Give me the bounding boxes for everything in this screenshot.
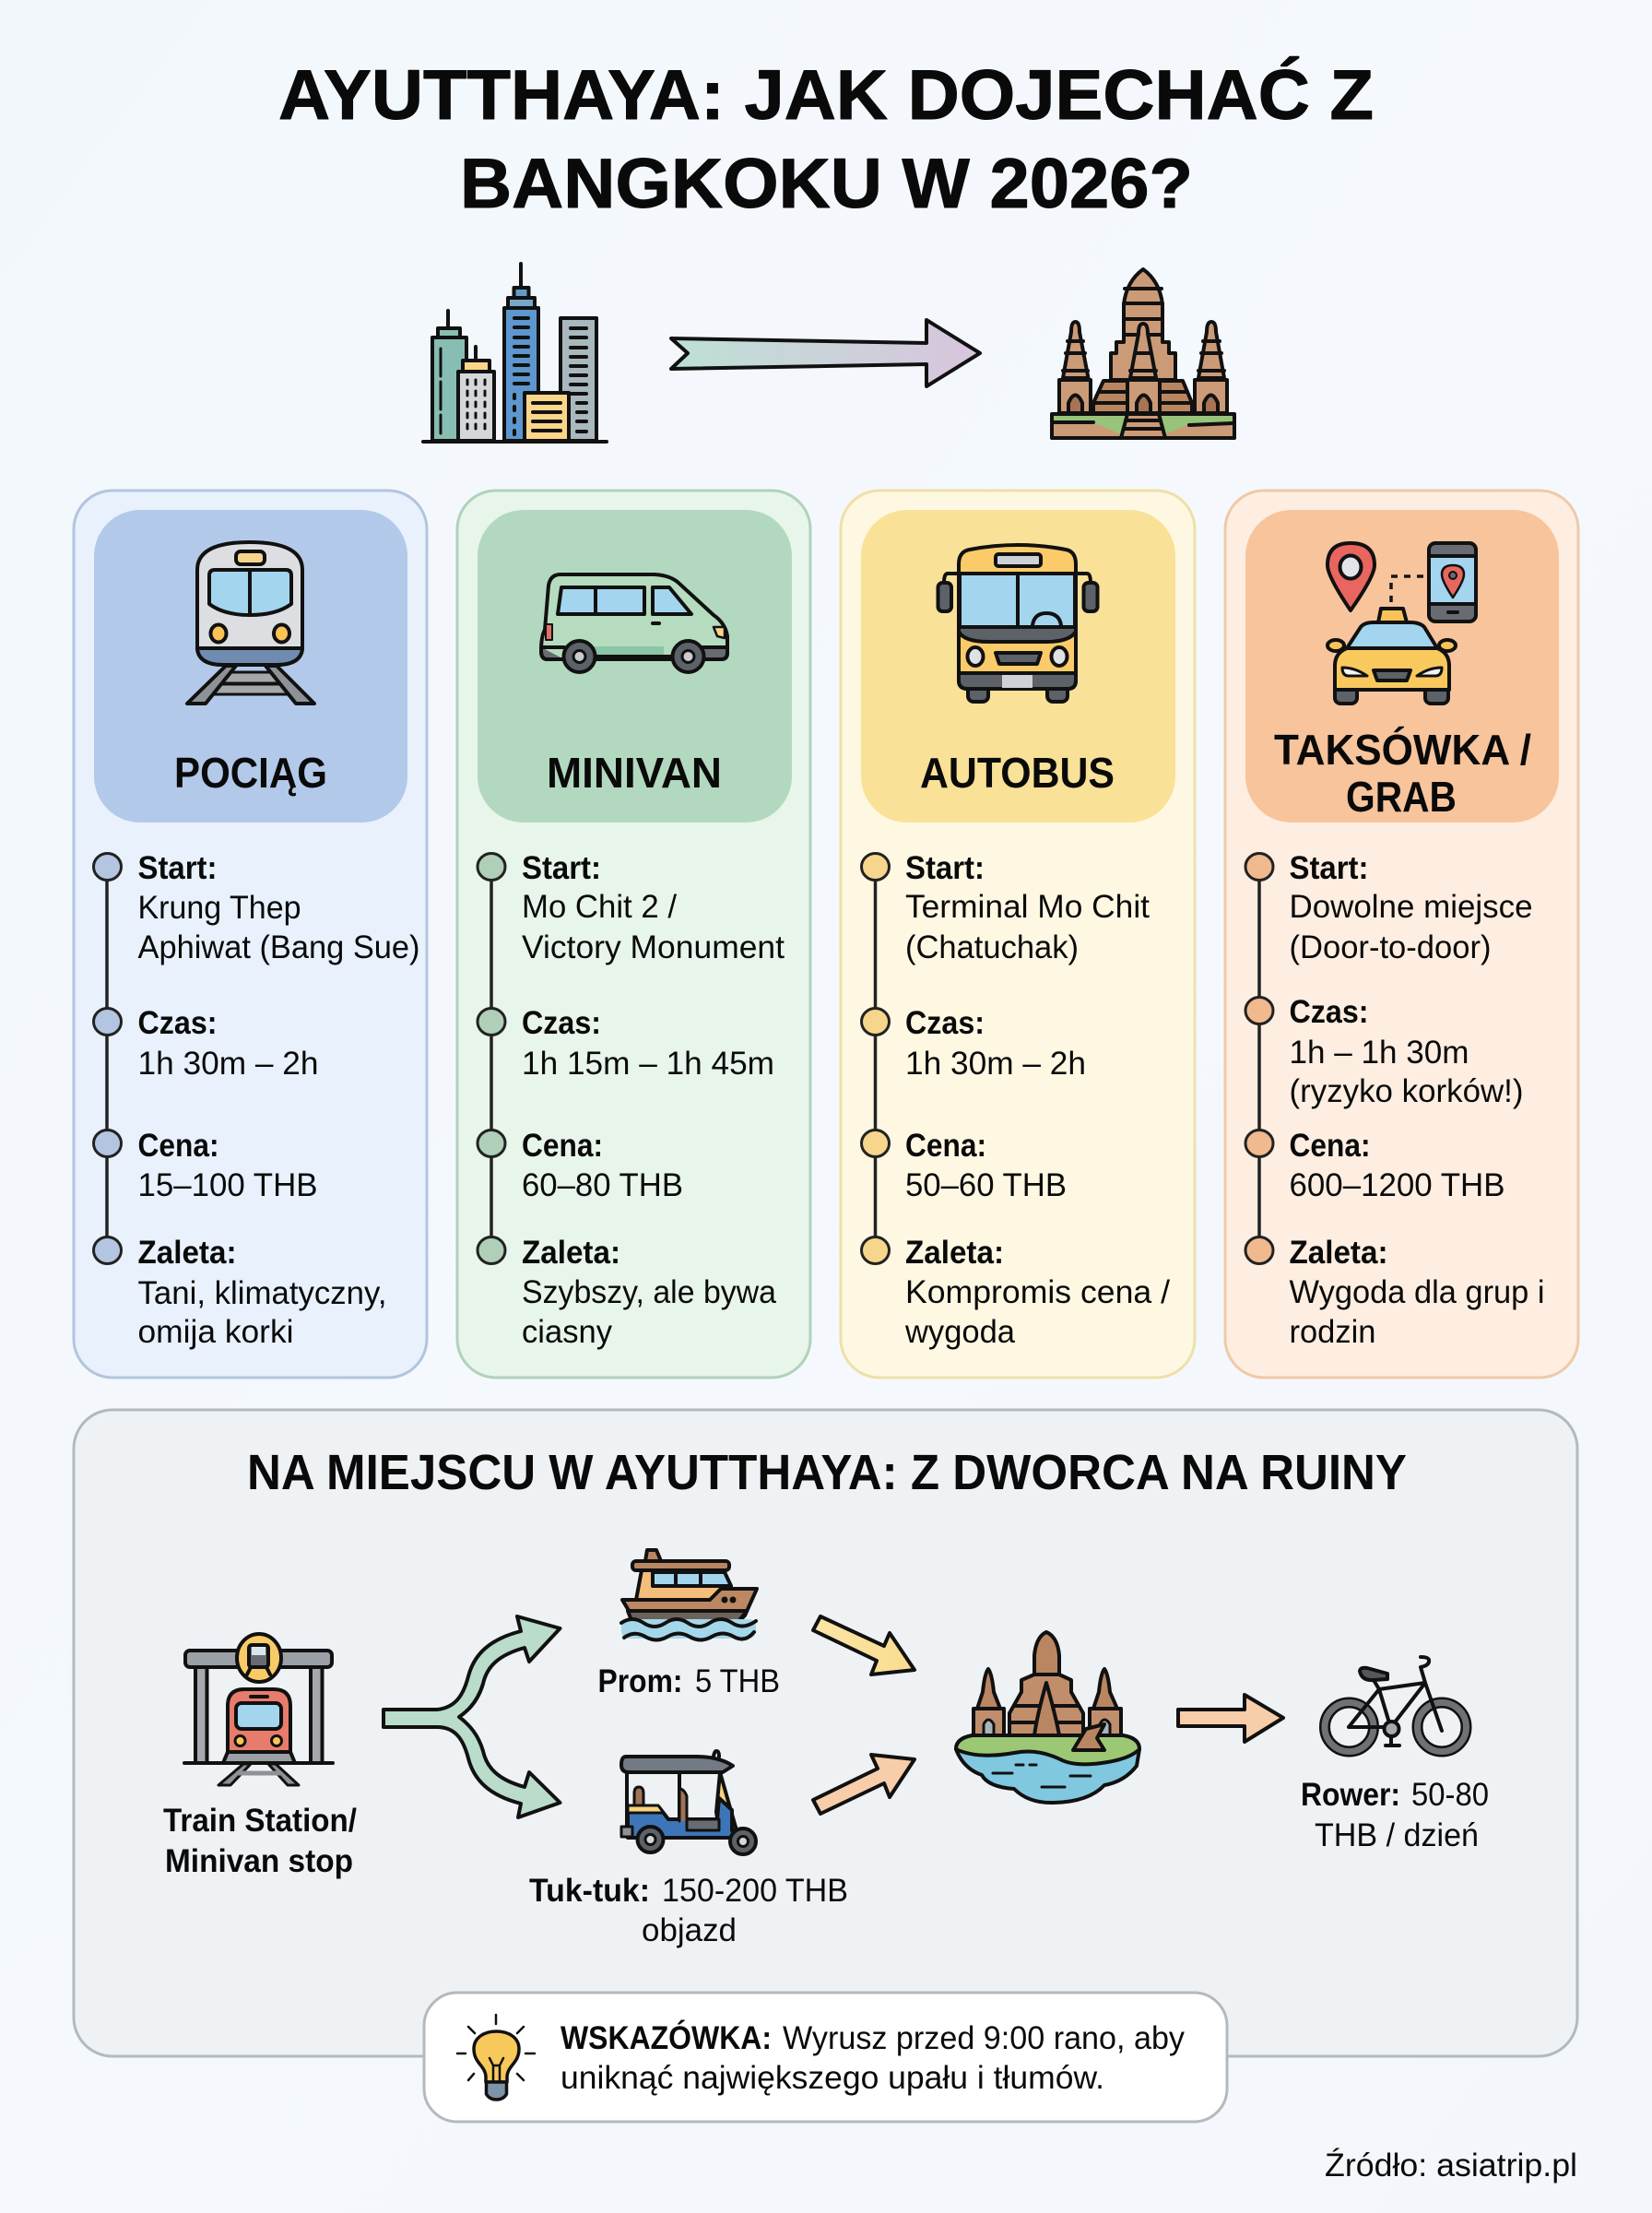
heading: na miejscu: NA MIEJSCU W AYUTTHAYA: Z DWORCA NA RUINY — [247, 1445, 1407, 1500]
text: minivan details: Szybszy, ale bywa — [522, 1274, 777, 1310]
label: tuk-tuk price: objazd — [642, 1912, 737, 1948]
text: minivan details: Czas: — [522, 1005, 601, 1041]
heading: taksówka / grab: TAKSÓWKA / — [1274, 726, 1531, 774]
text: pociąg details: Zaleta: — [138, 1235, 236, 1271]
title: BANGKOKU W 2026? — [460, 145, 1193, 223]
heading: taksówka / grab — [1274, 726, 1531, 821]
icon: bus — [938, 545, 1097, 702]
text: minivan details: Mo Chit 2 / — [522, 889, 677, 925]
icon: city skyline — [423, 264, 607, 442]
text: pociąg details: Tani, klimatyczny, — [138, 1275, 387, 1311]
text: wskazówka: uniknąć największego upału i tłumów. — [560, 2060, 1104, 2096]
timeline: pociąg — [94, 854, 122, 1263]
text: autobus details — [904, 850, 1170, 1350]
label: ferry price: 5 THB — [695, 1663, 780, 1699]
callout: wskazówka — [424, 1993, 1227, 2122]
text: autobus details: Terminal Mo Chit — [905, 889, 1150, 925]
text: autobus details: 1h 30m – 2h — [905, 1046, 1086, 1082]
heading: taksówka / grab: GRAB — [1346, 773, 1457, 821]
text: minivan details: ciasny — [522, 1314, 612, 1350]
text: autobus details: Czas: — [905, 1005, 985, 1041]
title: AYUTTHAYA: JAK DOJECHAĆ Z — [278, 56, 1374, 135]
icon: phone with app — [1429, 543, 1476, 621]
icon: train — [187, 542, 314, 704]
text: autobus details: Kompromis cena / — [905, 1274, 1170, 1310]
text: taksówka details: (ryzyko korków!) — [1289, 1073, 1523, 1109]
text: wskazówka: WSKAZÓWKA: — [560, 2019, 772, 2056]
text: pociąg details: Czas: — [138, 1005, 218, 1041]
label: tuk-tuk price: Tuk-tuk: — [529, 1873, 650, 1909]
text: autobus details: Start: — [905, 850, 985, 886]
panel header: pociąg — [94, 510, 407, 822]
icon: map pin — [1328, 543, 1375, 610]
icon: train station — [184, 1634, 333, 1785]
arrow: tuk-tuk to ruins — [813, 1755, 914, 1814]
text: taksówka details: Start: — [1289, 850, 1368, 886]
arrow: ferry to ruins — [813, 1616, 914, 1675]
icon: tuk-tuk — [621, 1751, 756, 1854]
text: autobus details: Cena: — [905, 1128, 986, 1164]
text: taksówka details — [1289, 850, 1545, 1350]
title — [278, 56, 1374, 223]
arrow: ruins to bicycle — [1178, 1695, 1283, 1742]
text: pociąg details — [138, 850, 420, 1350]
text: minivan details: 1h 15m – 1h 45m — [522, 1046, 774, 1082]
text: taksówka details: (Door-to-door) — [1289, 929, 1492, 965]
text: taksówka details: Zaleta: — [1289, 1235, 1388, 1271]
text: autobus details: 50–60 THB — [905, 1167, 1067, 1203]
text: taksówka details: Dowolne miejsce — [1289, 889, 1532, 925]
icon: light bulb — [457, 2015, 535, 2100]
text: minivan details: 60–80 THB — [522, 1167, 683, 1203]
text: autobus details: Zaleta: — [905, 1235, 1004, 1271]
text: pociąg details: 15–100 THB — [138, 1167, 317, 1203]
icon: minivan — [541, 574, 727, 672]
panel header: taksówka / grab — [1245, 510, 1559, 822]
label: bicycle price — [1301, 1777, 1489, 1853]
text: taksówka details: 600–1200 THB — [1289, 1167, 1504, 1203]
label: bicycle price: THB / dzień — [1315, 1817, 1479, 1853]
text: taksówka details: rodzin — [1289, 1314, 1375, 1350]
icon: Ayutthaya temple — [1052, 269, 1234, 438]
connector: dashed route — [1391, 576, 1425, 602]
heading: autobus: AUTOBUS — [920, 749, 1115, 797]
label: tuk-tuk price: 150-200 THB — [662, 1873, 848, 1909]
label: bicycle price: 50-80 — [1411, 1777, 1489, 1813]
label: ferry price: Prom: — [597, 1663, 682, 1699]
text: pociąg details: Cena: — [138, 1128, 219, 1164]
heading: pociąg: POCIĄG — [174, 749, 327, 797]
text: taksówka details: Cena: — [1289, 1128, 1370, 1164]
label: bicycle price: Rower: — [1301, 1777, 1400, 1813]
text: pociąg details: Krung Thep — [138, 890, 301, 926]
text: taksówka details: Wygoda dla grup i — [1289, 1274, 1545, 1310]
icon: bicycle — [1325, 1657, 1466, 1752]
text: minivan details: Zaleta: — [522, 1235, 620, 1271]
timeline: autobus — [861, 854, 889, 1263]
text: minivan details: Cena: — [522, 1128, 603, 1164]
label: train station: Train Station/ — [163, 1803, 357, 1839]
panel: pociąg — [74, 491, 427, 1378]
text: autobus details: wygoda — [904, 1314, 1016, 1350]
text: autobus details: (Chatuchak) — [905, 929, 1079, 965]
heading: minivan: MINIVAN — [547, 749, 722, 797]
text: wskazówka — [560, 2019, 1185, 2096]
label: ferry price — [597, 1663, 780, 1699]
panel header: minivan — [478, 510, 792, 822]
icon: temple island — [956, 1632, 1139, 1803]
timeline: taksówka — [1245, 854, 1273, 1263]
text: minivan details — [522, 850, 785, 1350]
text: minivan details: Victory Monument — [522, 929, 785, 965]
label: tuk-tuk price — [529, 1873, 848, 1948]
panel header: autobus — [861, 510, 1175, 822]
label: train station: Minivan stop — [165, 1843, 353, 1879]
panel: autobus — [841, 491, 1195, 1378]
icon: taxi — [1328, 609, 1456, 704]
icon: ferry — [621, 1550, 757, 1639]
text: pociąg details: 1h 30m – 2h — [138, 1046, 319, 1082]
text: pociąg details: omija korki — [138, 1314, 293, 1350]
arrow: Bangkok to Ayutthaya — [671, 320, 980, 386]
text: taksówka details: Czas: — [1289, 994, 1368, 1030]
text: taksówka details: 1h – 1h 30m — [1289, 1035, 1469, 1071]
text: wskazówka: Wyrusz przed 9:00 rano, aby — [783, 2020, 1185, 2056]
panel: na miejscu — [74, 1410, 1577, 2056]
text: pociąg details: Start: — [138, 850, 218, 886]
panel: minivan — [457, 491, 810, 1378]
arrow: fork to ferry and tuk-tuk — [384, 1616, 560, 1817]
panel: taksówka / grab — [1225, 491, 1578, 1378]
label: train station — [163, 1803, 357, 1879]
text: minivan details: Start: — [522, 850, 601, 886]
source: Źródło: asiatrip.pl — [1325, 2148, 1577, 2183]
text: pociąg details: Aphiwat (Bang Sue) — [138, 929, 420, 965]
timeline: minivan — [478, 854, 505, 1263]
